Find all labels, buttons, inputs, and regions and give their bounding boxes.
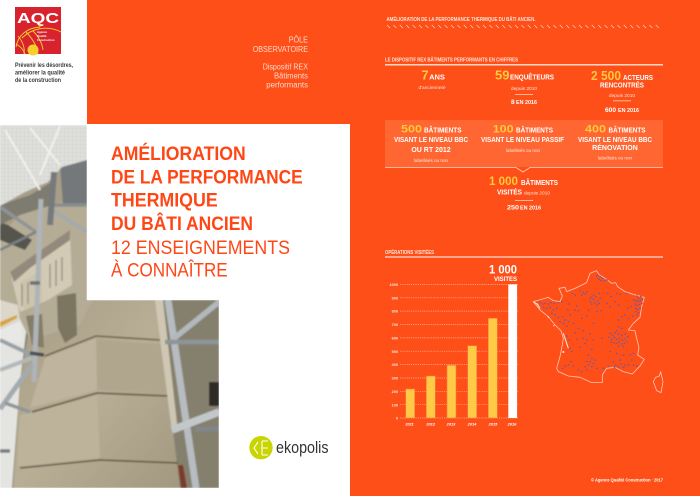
logo: AQC: Construction (37, 38, 55, 42)
bars (406, 318, 497, 418)
stat: 59 enquêteurs: 59 (495, 68, 509, 82)
stat: 400 bâtiments: RÉNOVATION (592, 143, 638, 152)
photo: scaffolding on old stone building (0, 125, 219, 488)
tagline: améliorer la qualité (15, 70, 66, 76)
y axis labels: 100 (392, 403, 398, 407)
y axis labels: 500 (392, 350, 398, 354)
stat: 7 ans: 7 (421, 68, 429, 82)
tagline: Prévenir les désordres, (15, 63, 73, 69)
stat: 400 bâtiments: labellisés ou non (598, 156, 633, 160)
stat: 2 500 acteurs rencontrés: 2 500 (591, 68, 621, 83)
wave divider (387, 25, 659, 28)
x axis labels (404, 422, 517, 427)
stat: 59 enquêteurs: ENQUÊTEURS (510, 72, 554, 82)
stat: 2 500 acteurs rencontrés: ACTEURS (623, 73, 653, 82)
x axis labels: 2011 (404, 422, 414, 427)
stat: 59 enquêteurs (495, 68, 554, 106)
stat: 7 ans (418, 68, 446, 91)
stat: 100 bâtiments (481, 124, 565, 153)
title: AMÉLIORATION (111, 142, 246, 165)
y axis labels: 900 (392, 296, 398, 300)
callout: 1 000 visites (489, 264, 518, 283)
y axis labels (390, 283, 398, 421)
scaffold pipes (0, 172, 219, 488)
stat: 1 000 bâtiments visités: BÂTIMENTS (521, 178, 558, 187)
stat: 100 bâtiments: BÂTIMENTS (516, 126, 553, 134)
y axis labels: 200 (392, 390, 398, 394)
operation dots (540, 275, 643, 372)
callout: 1 000 visites: VISITES (494, 276, 518, 283)
logo: AQC (15, 7, 61, 56)
title: THERMIQUE (111, 190, 218, 212)
stat: 1 000 bâtiments visités: VISITÉS (497, 188, 522, 196)
logo: ekopolis (249, 436, 328, 459)
tagline (15, 63, 73, 84)
stat: 100 bâtiments: VISANT LE NIVEAU PASSIF (481, 137, 565, 144)
text block: pôle observatoire: Bâtiments (274, 72, 308, 80)
panel: right orange page (350, 0, 700, 496)
stat: 7 ans: ANS (429, 72, 445, 82)
y axis labels: 1000 (390, 283, 398, 287)
panel: buildings breakdown (385, 120, 663, 172)
heading: report title: AMÉLIORATION DE LA PERFORMANCE THERMIQUE DU BÂTI ANCIEN. (386, 15, 536, 23)
y axis labels: 800 (392, 310, 398, 314)
stat: 500 bâtiments: 500 (401, 124, 422, 136)
heading: key figures: LE DISPOSITIF REX BÂTIMENTS PERFORMANTS EN CHIFFRES (385, 57, 518, 64)
stat: 500 bâtiments: OU RT 2012 (411, 147, 451, 154)
x axis labels: 2015 (488, 422, 498, 427)
text block: pôle observatoire: Dispositif REX (263, 62, 309, 72)
map: France with visited operations (533, 271, 663, 393)
subtitle: À CONNAÎTRE (111, 259, 228, 282)
stat: 59 enquêteurs: 8 (511, 99, 515, 106)
stat: 59 enquêteurs: depuis 2010 (511, 86, 537, 92)
Corsica (653, 372, 663, 393)
title: DU BÂTI ANCIEN (111, 211, 253, 235)
y axis labels: 600 (392, 336, 398, 340)
text block: pôle observatoire: OBSERVATOIRE (253, 45, 308, 54)
stat: 1 000 bâtiments visités: 250 (507, 204, 519, 212)
tagline: de la construction (15, 78, 61, 84)
copyright: © Agence Qualité Construction · 2017 (591, 476, 663, 482)
stat: 2 500 acteurs rencontrés: depuis 2010 (609, 93, 635, 99)
stat: 1 000 bâtiments visités: depuis 2010 (524, 190, 550, 196)
logo: ekopolis: ekopolis (276, 438, 328, 457)
carved stone capital (0, 200, 93, 348)
stat: 7 ans: d'ancienneté (418, 85, 446, 91)
callout: 1 000 visites: 1 000 (489, 264, 517, 276)
stat: 500 bâtiments: VISANT LE NIVEAU BBC (394, 137, 468, 144)
stat: 400 bâtiments: VISANT LE NIVEAU BBC (578, 137, 652, 144)
heading: visited operations: OPÉRATIONS VISITÉES (385, 248, 434, 256)
stat: 400 bâtiments (578, 124, 652, 160)
stat: 100 bâtiments: 100 (493, 124, 514, 136)
bar chart: visits per year (390, 264, 518, 427)
stat: 500 bâtiments: BÂTIMENTS (424, 126, 462, 134)
dark netting and scaffold floor (60, 160, 87, 205)
panel: top orange band (87, 0, 350, 124)
subtitle (111, 237, 290, 282)
title (111, 142, 303, 235)
stat: 500 bâtiments (394, 124, 468, 163)
y axis labels: 300 (392, 377, 398, 381)
text block: pôle observatoire (253, 36, 309, 90)
x axis labels: 2016 (507, 422, 517, 427)
stat: 1 000 bâtiments visités: EN 2016 (520, 206, 541, 212)
x axis labels: 2013 (446, 422, 456, 427)
stat: 400 bâtiments: BÂTIMENTS (608, 126, 646, 134)
stat: 2 500 acteurs rencontrés: 600 (605, 107, 616, 114)
protective net (0, 125, 87, 206)
stat: 1 000 bâtiments visités (489, 176, 558, 212)
stat: 2 500 acteurs rencontrés: EN 2016 (618, 108, 639, 114)
logo: AQC: AQC (17, 10, 59, 27)
panel: title background (87, 125, 350, 300)
y axis labels: 700 (392, 323, 398, 327)
y axis labels: 0 (396, 417, 398, 421)
text block: pôle observatoire: performants (266, 80, 308, 90)
logo: AQC: Qualité (37, 34, 47, 38)
stat: 400 bâtiments: 400 (585, 124, 606, 136)
stat: 1 000 bâtiments visités: 1 000 (489, 176, 518, 188)
stat: 2 500 acteurs rencontrés (591, 68, 653, 114)
subtitle: 12 ENSEIGNEMENTS (111, 237, 290, 259)
stat: 100 bâtiments: labellisés ou non (506, 148, 541, 153)
stat: 500 bâtiments: labellisés ou non (414, 158, 449, 163)
x axis labels: 2012 (425, 422, 436, 427)
stat: 2 500 acteurs rencontrés: RENCONTRÉS (600, 80, 644, 90)
stat: 59 enquêteurs: EN 2016 (516, 100, 537, 106)
y axis labels: 400 (392, 363, 398, 367)
logo: AQC: Agence (37, 30, 48, 34)
title: DE LA PERFORMANCE (111, 166, 303, 188)
text block: pôle observatoire: PÔLE (289, 36, 308, 44)
x axis labels: 2014 (467, 422, 477, 427)
